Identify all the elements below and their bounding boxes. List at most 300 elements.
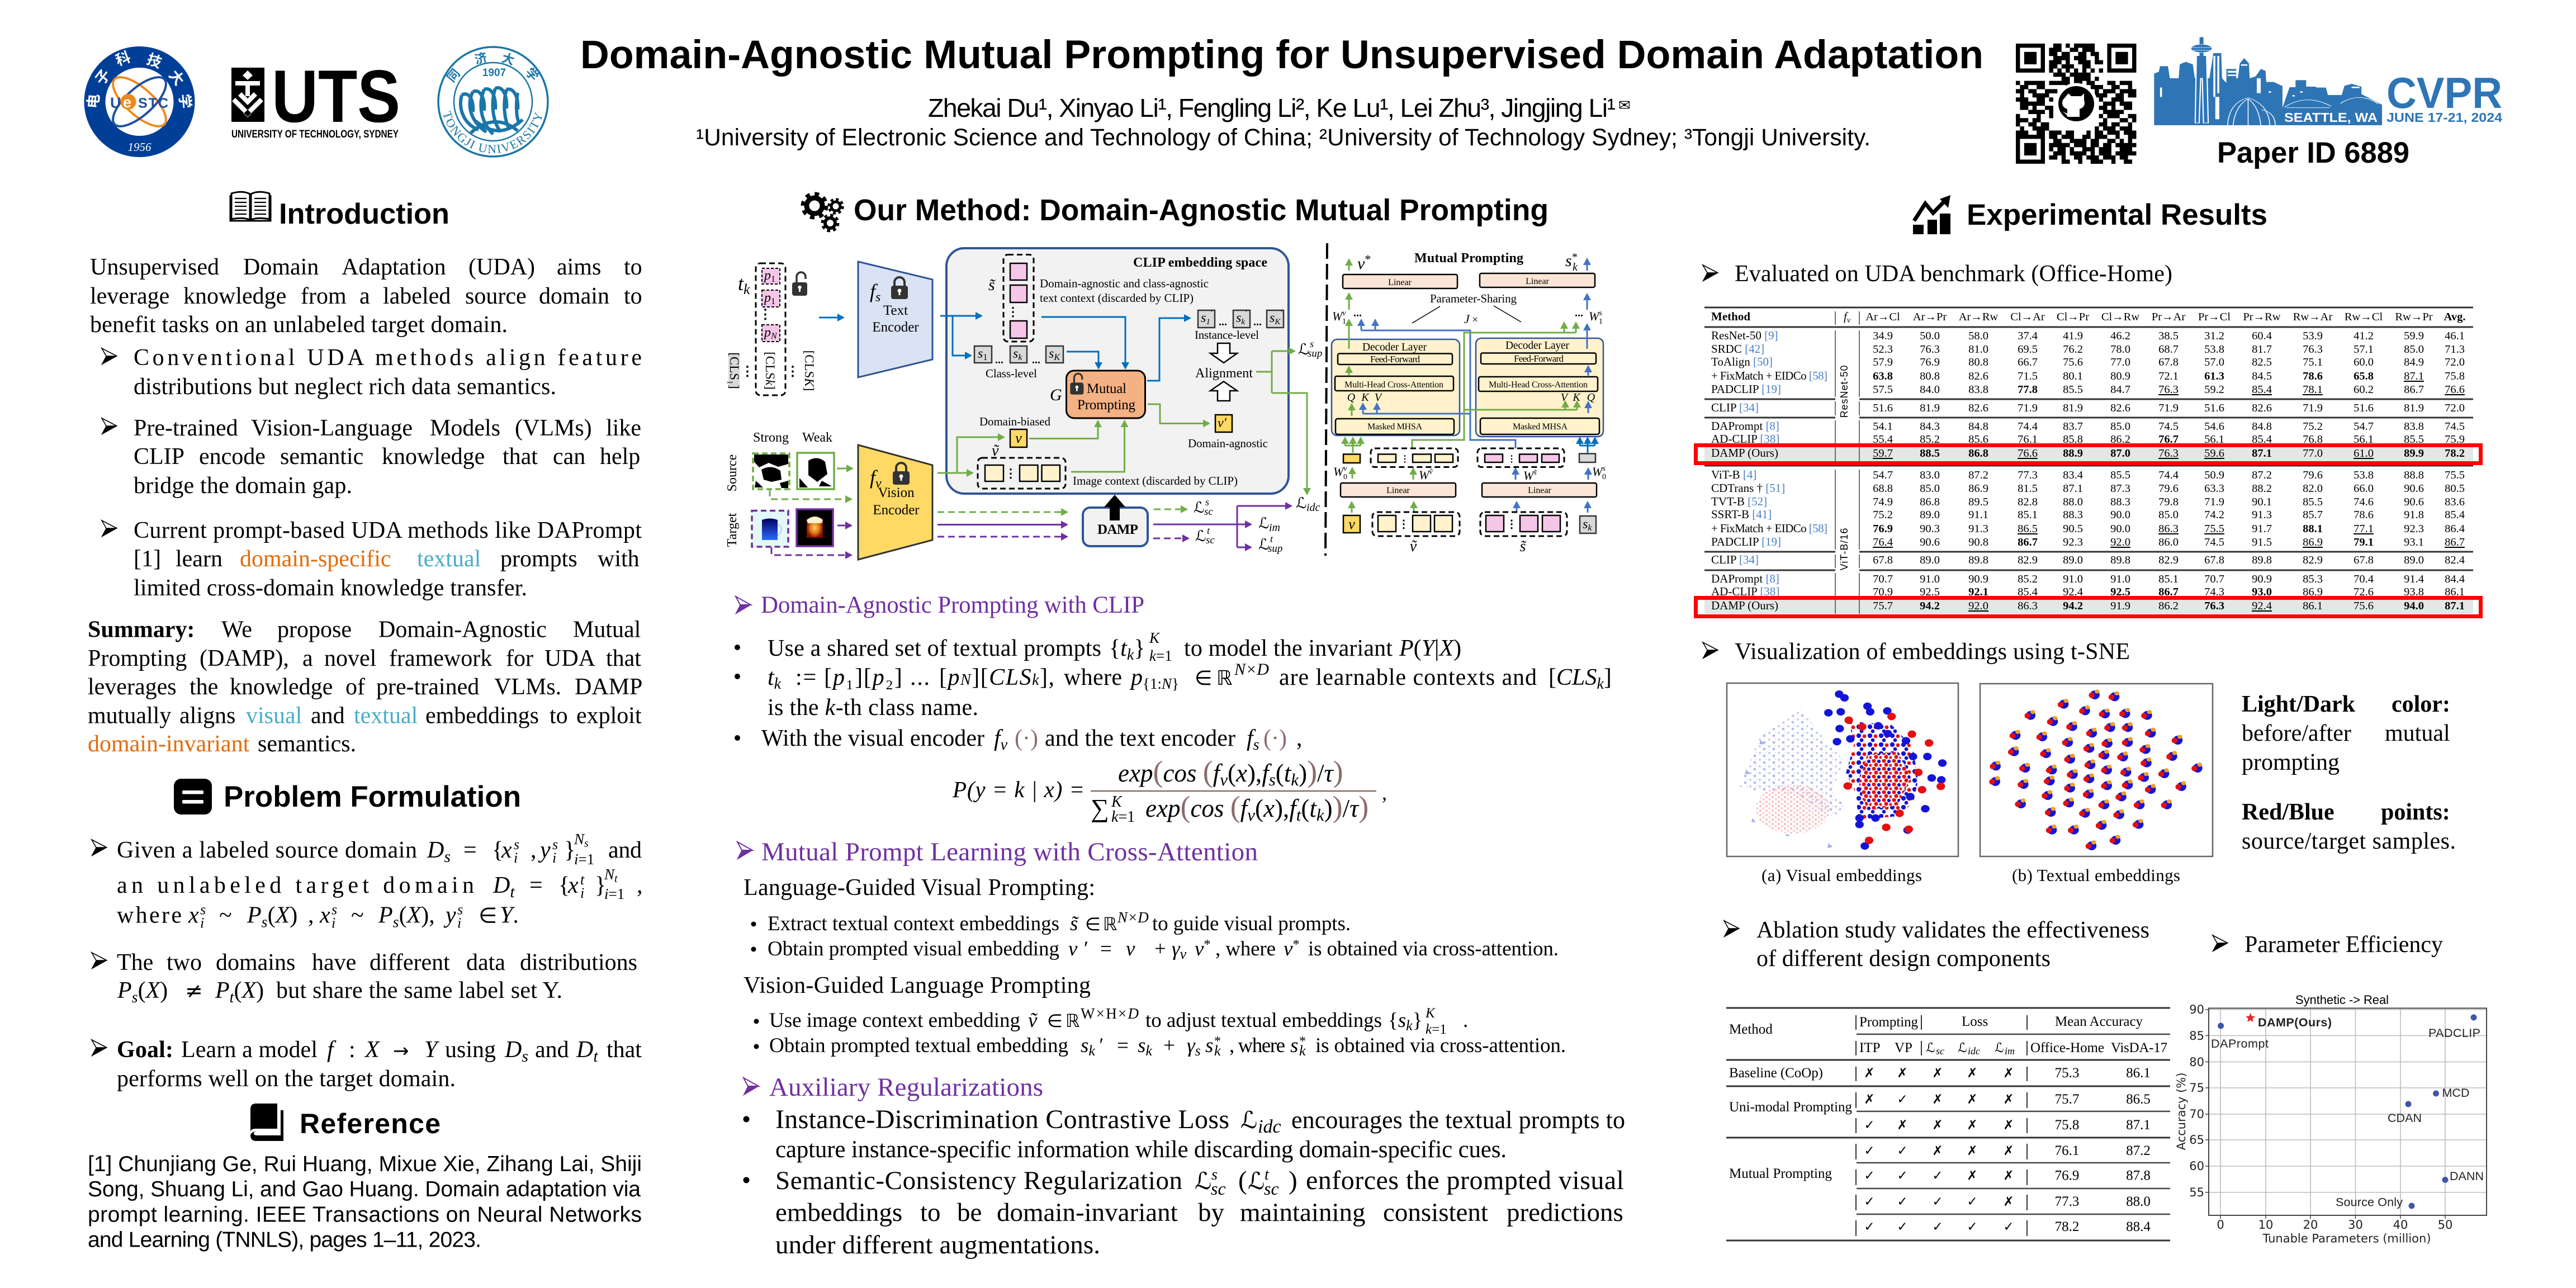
weight labels <box>1332 251 1606 482</box>
table header: Rw→Cl <box>2345 311 2383 323</box>
table rows: ViT-B/16: 79.8 <box>2158 496 2179 508</box>
check marks: ✗ <box>1932 1144 1943 1158</box>
bullet: domains definition: ∈ <box>479 903 497 928</box>
text: summary: knowledge <box>230 674 333 700</box>
decoder layer: textual: Q <box>1587 391 1595 404</box>
prompt stack: N <box>770 332 778 341</box>
bullet: domains definition: i <box>552 850 556 866</box>
table rows: ViT-B/16: 75.7 <box>1873 600 1893 612</box>
logo: CVPR 2024 Seattle: JUNE 17-21, 2024 <box>2386 110 2502 125</box>
table rows: ViT-B/16: 86.7 <box>2018 536 2038 548</box>
panel: mutual prompt learning <box>737 837 1566 1059</box>
bullet: image context: k <box>1406 1017 1413 1034</box>
table rows: ViT-B/16: 82.4 <box>2445 554 2465 566</box>
gridlines and frame <box>2205 1008 2487 1219</box>
bullet: prompted visual: , where <box>1215 937 1276 960</box>
table rows: ResNet-50: 80.1 <box>2063 370 2083 382</box>
table rows: ResNet-50: 76.3 <box>2158 447 2179 460</box>
table rows: ResNet-50: 66.7 <box>2018 356 2038 368</box>
table rows: ResNet-50: 78.2 <box>2445 447 2465 460</box>
table rows: ResNet-50: 82.5 <box>2252 356 2272 368</box>
formula: softmax: s <box>1269 770 1276 789</box>
table rows: ResNet-50: 57.9 <box>1873 356 1893 368</box>
caption: a: (a) Visual embeddings <box>1761 865 1922 885</box>
bullet: encoders: (·) <box>1015 726 1038 751</box>
table rows: ResNet-50: 75.6 <box>2063 356 2083 368</box>
text: summary: domain-invariant <box>88 731 250 757</box>
bullet: prompt definition: t <box>768 665 774 690</box>
class-level cells: s <box>978 347 983 361</box>
table rows: ViT-B/16: 83.6 <box>2445 496 2465 508</box>
caption: b: (b) Textual embeddings <box>2012 865 2180 885</box>
bullet: prompted textual: * <box>1214 1034 1221 1049</box>
diagram: mutual prompting decoder <box>1332 251 1606 555</box>
title: Mutual Prompting <box>1414 251 1523 266</box>
table rows: ViT-B/16: 92.3 <box>2063 536 2083 548</box>
data labels: DANN <box>2450 1169 2484 1183</box>
table rows: ViT-B/16: 86.1 <box>2445 586 2465 598</box>
bullet: domains definition: i <box>514 850 518 866</box>
logo: CVPR 2024 Seattle: CVPR <box>2386 68 2502 117</box>
table rows: ViT-B/16: PADCLIP [19] <box>1711 535 1781 548</box>
table rows: ViT-B/16: 75.5 <box>2204 523 2224 535</box>
bullet: domains definition: ( <box>268 902 276 928</box>
text: summary: for <box>506 646 533 671</box>
table rows: ResNet-50: 56.1 <box>2204 433 2224 446</box>
accuracy values: 87.1 <box>2126 1117 2151 1133</box>
text context cells: ⋮ <box>1007 305 1019 319</box>
table rows: ResNet-50: 86.2 <box>2110 433 2130 446</box>
class-level cells: Class-level <box>986 367 1037 380</box>
accuracy values: 76.1 <box>2055 1143 2079 1158</box>
table rows: ResNet-50: 83.7 <box>2063 420 2083 433</box>
token cells: s <box>1583 517 1588 532</box>
table rows: ViT-B/16: 82.9 <box>2303 554 2323 566</box>
table rows: ResNet-50: 72.1 <box>2158 370 2179 382</box>
check marks: ✓ <box>1864 1168 1875 1183</box>
table rows: ViT-B/16: 90.6 <box>2404 496 2424 508</box>
formula: softmax: t <box>1296 805 1302 825</box>
table rows: ResNet-50: 60.4 <box>2252 330 2272 342</box>
bullet: domains definition: X), <box>407 902 435 928</box>
text: intro paragraph: from <box>301 283 347 309</box>
table header: Rw→Pr <box>2395 311 2433 323</box>
text: citation <box>88 1152 642 1252</box>
bullet: domains definition: x <box>501 837 512 863</box>
alignment: Domain-agnostic <box>1188 437 1268 450</box>
token cells: ṽ <box>1410 538 1418 555</box>
bullet: image context: ∈ <box>1047 1010 1063 1031</box>
loss labels: im <box>1269 522 1280 534</box>
table rows: ResNet-50: 59.6 <box>2204 447 2224 460</box>
table rows: ViT-B/16: 88.0 <box>2063 496 2083 508</box>
table rows: ViT-B/16: 70.4 <box>2354 573 2374 585</box>
bullet: pre-trained VLMs: Models <box>430 415 500 441</box>
bullet: different distributions: P <box>215 978 230 1003</box>
table rows: ResNet-50: 75.8 <box>2445 370 2465 382</box>
logo: UESTC: 技 <box>144 48 165 72</box>
logo: Tongji University: 大 <box>500 48 517 69</box>
check marks: ✗ <box>2003 1144 2014 1158</box>
vision encoder: f <box>870 466 875 489</box>
weight labels: ... <box>1575 307 1583 319</box>
table header: Cl→Rw <box>2101 311 2139 323</box>
scatter chart <box>2175 993 2487 1246</box>
vertical arrows <box>1345 259 1595 513</box>
chart title: Synthetic -> Real <box>2295 993 2389 1007</box>
weight labels: ... <box>1353 307 1362 319</box>
bullet: semantic consistency: to <box>920 1198 941 1227</box>
table rows: ResNet-50: 85.0 <box>2404 343 2424 356</box>
table rows: ViT-B/16: DAPrompt [8] <box>1711 572 1779 585</box>
heading: Experimental Results <box>1913 195 2267 234</box>
text encoder <box>858 262 932 377</box>
table rows: ResNet-50: 80.9 <box>2110 370 2130 382</box>
bullet: goal: using <box>445 1037 496 1063</box>
table rows: ResNet-50: 53.8 <box>2204 343 2224 356</box>
decoder layer: visual: Masked MHSA <box>1367 422 1422 432</box>
table rows: ResNet-50: 51.6 <box>2354 402 2374 414</box>
bullet: prompt-based UDA: textual <box>417 546 481 572</box>
table rows: ResNet-50: 76.3 <box>2158 383 2179 396</box>
table rows: ViT-B/16: 90.1 <box>2252 496 2272 508</box>
data labels <box>2211 1016 2484 1209</box>
table rows: ViT-B/16: 86.3 <box>2018 600 2038 612</box>
bullet: goal: D <box>576 1037 593 1063</box>
bullet: pre-trained VLMs: help <box>600 444 640 470</box>
table rows: ResNet-50: 85.8 <box>2063 433 2083 446</box>
accuracy values: 88.4 <box>2126 1219 2151 1234</box>
decoder layer: visual: Decoder Layer <box>1362 342 1427 353</box>
table rows: ViT-B/16: 76.9 <box>1873 523 1893 535</box>
logo: UESTC <box>82 46 197 157</box>
weight labels: W <box>1333 465 1343 479</box>
table rows: ViT-B/16: 86.3 <box>2158 523 2179 535</box>
table rows: ResNet-50: 86.8 <box>1968 447 1988 460</box>
bullet: image context: } <box>1413 1009 1422 1032</box>
bullet: goal: Learn a model <box>181 1037 318 1063</box>
decoder layer: textual: Masked MHSA <box>1513 422 1568 432</box>
class-level cells: ... <box>995 354 1003 366</box>
text: intro paragraph: to <box>624 254 642 280</box>
bullet: domains definition: X) <box>276 902 297 928</box>
table rows: ResNet-50 <box>1711 329 2465 460</box>
bullet: pre-trained VLMs: CLIP <box>134 444 184 470</box>
table header: idc <box>1968 1045 1980 1057</box>
loss labels <box>1194 338 1322 555</box>
bullet: image context: ṽ <box>1028 1009 1038 1032</box>
bullet: prompted visual: v <box>1195 937 1204 960</box>
accuracy values: 87.8 <box>2126 1168 2151 1183</box>
input images: Source <box>725 454 740 491</box>
bullet: domains definition: t <box>510 883 515 901</box>
bullet: image context: k=1 <box>1426 1022 1447 1037</box>
prompt stack: ⋮ <box>786 364 799 379</box>
table rows: ResNet-50: 54.7 <box>2354 420 2374 433</box>
table rows: ResNet-50: ResNet-50 [9] <box>1711 329 1778 342</box>
table rows: ViT-B/16: 88.3 <box>2110 496 2130 508</box>
bullet: different distributions: X) <box>146 978 168 1003</box>
chart: textual embeddings <box>1980 684 2213 856</box>
text: summary: UDA <box>544 646 596 671</box>
bullet: instance discrimination: capture instance-specific information while discarding domain-specific cues. <box>775 1137 1507 1163</box>
instance-level cells: ′ <box>1245 309 1247 318</box>
token cells: ⋮ <box>1398 518 1409 531</box>
bullet: domains definition: i <box>580 885 584 901</box>
table rows: ViT-B/16 <box>1711 468 2465 612</box>
bullet: domains definition: = <box>463 837 477 863</box>
table rows: ViT-B/16: 86.9 <box>2303 586 2323 598</box>
bullet: different distributions: ≠ <box>185 978 203 1003</box>
table rows: ViT-B/16: 85.1 <box>2018 509 2038 521</box>
table rows: ResNet-50: 59.2 <box>2204 383 2224 396</box>
decoder layer: textual: Decoder Layer <box>1505 340 1570 352</box>
table rows: ViT-B/16: 76.3 <box>2204 600 2224 612</box>
check marks: ✓ <box>1897 1220 1908 1234</box>
bullet: prompted textual: s <box>1290 1034 1298 1057</box>
bullet: shared prompts: {t <box>1109 636 1127 661</box>
weight labels: s̃ <box>1533 468 1537 477</box>
bullet: prompt definition: ∈ <box>1195 667 1212 690</box>
bullet: prompted visual: is obtained via cross-attention. <box>1308 937 1559 960</box>
bullet: shared prompts: k=1 <box>1149 647 1172 664</box>
x axis: 20 <box>2303 1218 2318 1232</box>
loss labels: ℒ <box>1258 536 1269 553</box>
bullet: domains definition: s <box>457 901 463 918</box>
table rows: ViT-B/16: 93.8 <box>2404 586 2424 598</box>
mutual prompting module: G <box>1050 386 1062 404</box>
bullet: semantic consistency: under different augmentations. <box>775 1230 1100 1259</box>
text: intro paragraph: source <box>465 283 527 309</box>
bullet: conventional UDA: Conventional UDA methods align feature <box>134 345 642 371</box>
bullet: prompt definition: ℝ <box>1216 667 1233 690</box>
bullet: pre-trained VLMs: can <box>553 444 585 470</box>
formula: softmax: x),f <box>1236 759 1269 787</box>
text encoder: Text <box>883 303 908 318</box>
table rows: ResNet-50: 41.2 <box>2354 330 2374 342</box>
table rows: ResNet-50: 76.6 <box>2445 383 2465 396</box>
prompt stack <box>727 263 816 395</box>
table rows: ResNet-50: 77.0 <box>2110 356 2130 368</box>
table rows: ViT-B/16: 91.3 <box>1968 523 1988 535</box>
logo: UTS: UNIVERSITY OF TECHNOLOGY, SYDNEY <box>231 128 399 140</box>
table rows: ViT-B/16: 79.6 <box>2303 469 2323 481</box>
table header: Loss <box>1962 1014 1988 1029</box>
table rows: ResNet-50: 81.9 <box>1920 402 1940 414</box>
table rows: ResNet-50: 74.5 <box>2445 420 2465 433</box>
table rows: ResNet-50: AD-CLIP [38] <box>1711 432 1779 446</box>
loss labels: idc <box>1306 501 1320 514</box>
bullet: different distributions: distributions <box>520 950 637 976</box>
bullet: semantic consistency: ) <box>1289 1166 1298 1195</box>
bullet: domains definition: P <box>378 902 393 928</box>
table header: ITP <box>1859 1040 1881 1055</box>
vision encoder <box>858 445 932 560</box>
x axis <box>2217 1218 2452 1246</box>
table rows: ViT-B/16: 91.7 <box>2252 523 2272 535</box>
formula: softmax: , <box>1382 782 1387 804</box>
table rows: ResNet-50: 75.9 <box>2445 433 2465 446</box>
damp module: DAMP <box>1097 522 1138 537</box>
bullet: pre-trained VLMs: Vision-Language <box>251 415 413 441</box>
decoder layer: visual: Feed-Forward <box>1370 354 1420 364</box>
bullet: semantic consistency: t <box>1265 1166 1270 1183</box>
bullet: encoders: and the text encoder <box>1045 726 1235 751</box>
bullet: semantic consistency: sc <box>1264 1178 1279 1199</box>
bullet: conventional UDA <box>102 345 642 400</box>
formula: softmax: P(y = k | x) = <box>952 776 1085 802</box>
check marks: ✗ <box>2003 1118 2014 1133</box>
loss labels: s <box>1205 496 1209 508</box>
bullet: goal: X <box>364 1037 381 1063</box>
bullet: semantic consistency: by <box>1198 1198 1224 1227</box>
bullet: image context: K <box>1425 1006 1436 1021</box>
table rows: ResNet-50: 81.7 <box>2252 343 2272 356</box>
weight labels: s <box>1599 309 1602 318</box>
bullet: encoders: With the visual encoder <box>761 726 984 751</box>
check marks: ✓ <box>1864 1118 1875 1133</box>
class-level cells: K <box>1053 353 1060 362</box>
bullet: instance discrimination <box>744 1105 1625 1163</box>
formula: softmax: v <box>1220 770 1228 789</box>
x axis: 10 <box>2258 1218 2273 1232</box>
prompt stack: p <box>764 325 771 340</box>
text: color legend <box>2242 692 2456 854</box>
bullet: prompted textual: k <box>1145 1043 1152 1059</box>
bullet: prompt definition: k <box>774 675 782 693</box>
flow arrows: encoders to damp <box>770 468 1291 555</box>
table rows: ViT-B/16: 90.6 <box>1920 536 1940 548</box>
table rows: ResNet-50: SRDC [42] <box>1711 342 1764 356</box>
clip embedding space <box>946 248 1289 494</box>
table rows: ViT-B/16: 85.5 <box>2110 469 2130 481</box>
formula: softmax: ( <box>1255 794 1263 822</box>
table rows: ResNet-50: 78.6 <box>2303 370 2323 382</box>
check marks: ✓ <box>1897 1195 1908 1209</box>
bullet: pre-trained VLMs: that <box>503 444 538 470</box>
text: summary: DAMP <box>575 674 642 700</box>
table rows: ViT-B/16: 86.4 <box>2445 523 2465 535</box>
x axis: 30 <box>2348 1218 2363 1232</box>
table rows: ResNet-50: 63.8 <box>1873 370 1893 382</box>
weight labels: 1 <box>1342 318 1346 326</box>
bullet: prompted textual: s <box>1081 1034 1088 1057</box>
weight labels: W <box>1523 468 1533 482</box>
table rows: ViT-B/16: 92.5 <box>2110 586 2130 598</box>
bullet: pre-trained VLMs: Pre-trained <box>134 415 238 441</box>
table rows: ResNet-50: 84.3 <box>1920 420 1940 433</box>
check marks: ✓ <box>1967 1195 1978 1209</box>
bullet: prompt definition: [pN][CLSk], <box>939 665 1054 690</box>
input images: Target <box>725 513 740 547</box>
chart: visual embeddings <box>1727 683 1958 856</box>
bullet: domains definition: { <box>558 873 570 898</box>
table rows: ViT-B/16: 90.0 <box>2110 509 2130 521</box>
text: intro paragraph: labeled <box>383 283 451 309</box>
table rows: ViT-B/16: 66.0 <box>2354 482 2374 495</box>
decoder layer: visual: Multi-Head Cross-Attention <box>1344 380 1443 390</box>
table rows: ViT-B/16: 82.8 <box>2018 496 2038 508</box>
bullet: encoders: f <box>994 726 1001 751</box>
table rows: ViT-B/16: 90.9 <box>2252 573 2272 585</box>
decoder layer: visual: V <box>1375 391 1383 404</box>
table rows: ResNet-50: 78.1 <box>2303 383 2323 396</box>
bullet: prompt-based UDA: Current prompt-based UDA methods like DAPrompt <box>134 518 642 543</box>
backbone labels <box>1839 364 1850 570</box>
bullet: prompted textual: + <box>1163 1034 1175 1057</box>
bullet: semantic consistency: consistent <box>1383 1198 1488 1227</box>
heading: Domain-Agnostic Prompting with CLIP <box>761 592 1144 618</box>
text: summary: embeddings <box>425 703 539 729</box>
table rows: ViT-B/16: 87.1 <box>2063 482 2083 495</box>
bullet: semantic consistency: ( <box>1238 1166 1247 1195</box>
text: intro paragraph: (UDA) <box>468 254 535 280</box>
table rows: ResNet-50: 87.0 <box>2110 447 2130 460</box>
table header: VisDA-17 <box>2111 1040 2167 1055</box>
bullet: pre-trained VLMs: like <box>606 415 641 441</box>
check marks: ✗ <box>1967 1118 1978 1133</box>
table rows: ResNet-50: 85.5 <box>2063 383 2083 396</box>
instance-level cells: s <box>1201 311 1206 325</box>
logo: Tongji University <box>437 46 549 158</box>
check marks: ✗ <box>1932 1092 1943 1107</box>
table rows: ResNet-50: 61.0 <box>2354 447 2374 460</box>
table rows: ResNet-50: 76.2 <box>2063 343 2083 356</box>
bullet: extract textual context: s̃ <box>1070 912 1079 935</box>
loss labels: t <box>1207 525 1210 536</box>
weight labels: v <box>1357 254 1365 273</box>
table rows: ResNet-50: 76.7 <box>2158 433 2179 446</box>
bullet: prompt definition: := [p₁][p₂] ... <box>795 665 930 690</box>
accuracy values: 78.2 <box>2055 1219 2079 1234</box>
text: summary: Summary: <box>88 617 195 643</box>
title text: Experimental Results <box>1967 198 2267 231</box>
bullet: prompted textual: k <box>1299 1043 1306 1059</box>
text context cells: s̃ <box>988 276 996 294</box>
formula: softmax: ( <box>1276 759 1284 787</box>
loss labels: ℒ <box>1298 341 1309 358</box>
vision encoder: Vision <box>878 485 915 500</box>
table rows: ViT-B/16: 84.4 <box>2445 573 2465 585</box>
check marks: ✓ <box>1967 1220 1978 1234</box>
mutual prompting module <box>1050 371 1145 418</box>
panel: t-SNE visualization <box>1703 639 2456 885</box>
table rows: ViT-B/16: 86.9 <box>2303 536 2323 548</box>
table rows: ResNet-50: 84.8 <box>1968 420 1988 433</box>
table header: ℒ <box>1926 1041 1935 1055</box>
bullet: prompted visual: Obtain prompted visual embedding <box>768 937 1059 960</box>
loss labels: sup <box>1268 543 1282 555</box>
table header: Pr→Rw <box>2243 311 2281 323</box>
table rows: ViT-B/16: 78.6 <box>2354 509 2374 521</box>
prompt stack: p <box>764 268 771 283</box>
text: summary: Mutual <box>573 617 641 643</box>
table rows: ResNet-50: 53.9 <box>2303 330 2323 342</box>
table rows: ViT-B/16: 67.8 <box>2354 554 2374 566</box>
bullet: prompted textual: k <box>1214 1043 1221 1059</box>
data points <box>2218 1013 2476 1209</box>
table rows: ViT-B/16: 90.8 <box>1968 536 1988 548</box>
bullet: prompted textual: Obtain prompted textual embedding <box>769 1034 1068 1057</box>
check marks: ✗ <box>2003 1092 2014 1107</box>
table rows: ViT-B/16: 87.2 <box>1968 469 1988 481</box>
table rows: ViT-B/16: 89.0 <box>2404 554 2424 566</box>
table rows: ResNet-50: 60.2 <box>2354 383 2374 396</box>
data labels: Source Only <box>2336 1195 2403 1209</box>
text: color legend: prompting <box>2242 750 2340 775</box>
bullet: goal: s <box>522 1047 528 1066</box>
table rows: ViT-B/16: 87.2 <box>2252 469 2272 481</box>
